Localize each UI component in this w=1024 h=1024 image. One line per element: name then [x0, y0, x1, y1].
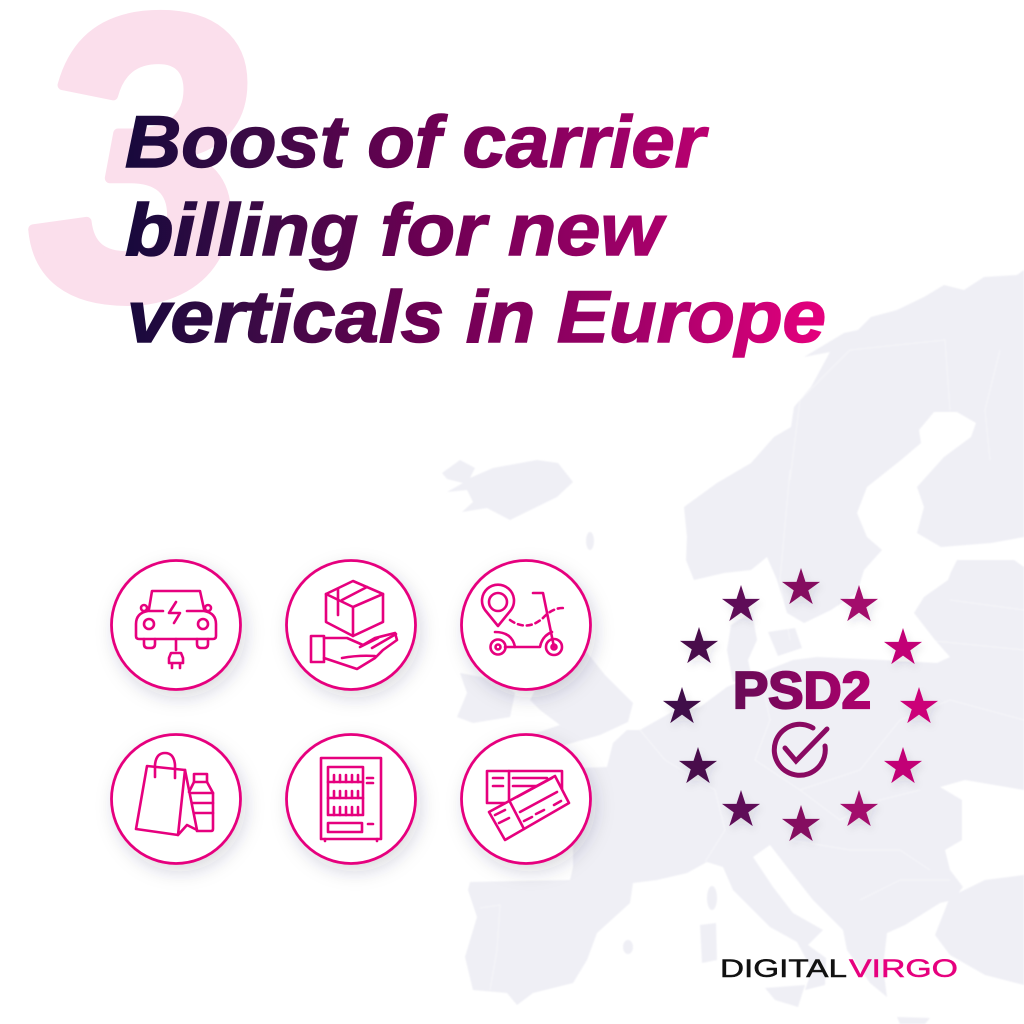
- Digital Virgo logo: VIRGO: [849, 955, 958, 983]
- map: Balearic island: [623, 940, 633, 954]
- title: billing for new: [125, 190, 667, 271]
- icon: electric car: [112, 560, 240, 690]
- map: borders: [480, 340, 1024, 990]
- map: Turkey: [935, 875, 1024, 985]
- map: Danish islands: [768, 628, 802, 656]
- background map of Europe: [442, 270, 1024, 1024]
- icon: scooter and location pin: [462, 560, 590, 690]
- map: Sardinia: [700, 923, 717, 963]
- map: Denmark: [727, 612, 757, 682]
- title: verticals in Europe: [127, 277, 826, 358]
- icon: shopping bag and bottle: [112, 734, 240, 864]
- map: Crete: [897, 1017, 930, 1024]
- Digital Virgo logo: DIGITAL: [720, 955, 847, 983]
- PSD2 badge: [663, 568, 938, 841]
- map: Corsica: [707, 886, 717, 910]
- map: Scandinavia: [684, 270, 1024, 623]
- map: mainland Europe: [465, 560, 1024, 1005]
- title: Boost of carrier: [125, 102, 709, 183]
- icon: check mark in circle: [774, 724, 827, 775]
- map: Iceland: [442, 460, 573, 520]
- icon: parcel on hand: [286, 560, 416, 690]
- map: Ireland: [457, 673, 515, 723]
- Digital Virgo logo: [720, 955, 958, 983]
- ring of twelve stars: [663, 568, 938, 841]
- map: Shetland: [586, 532, 594, 550]
- map: Sicily: [765, 985, 805, 1007]
- title: [125, 102, 826, 358]
- map: Great Britain: [530, 650, 633, 745]
- PSD2 label: PSD2: [733, 662, 871, 720]
- icon: tickets: [462, 734, 590, 864]
- icon: vending machine: [286, 734, 416, 864]
